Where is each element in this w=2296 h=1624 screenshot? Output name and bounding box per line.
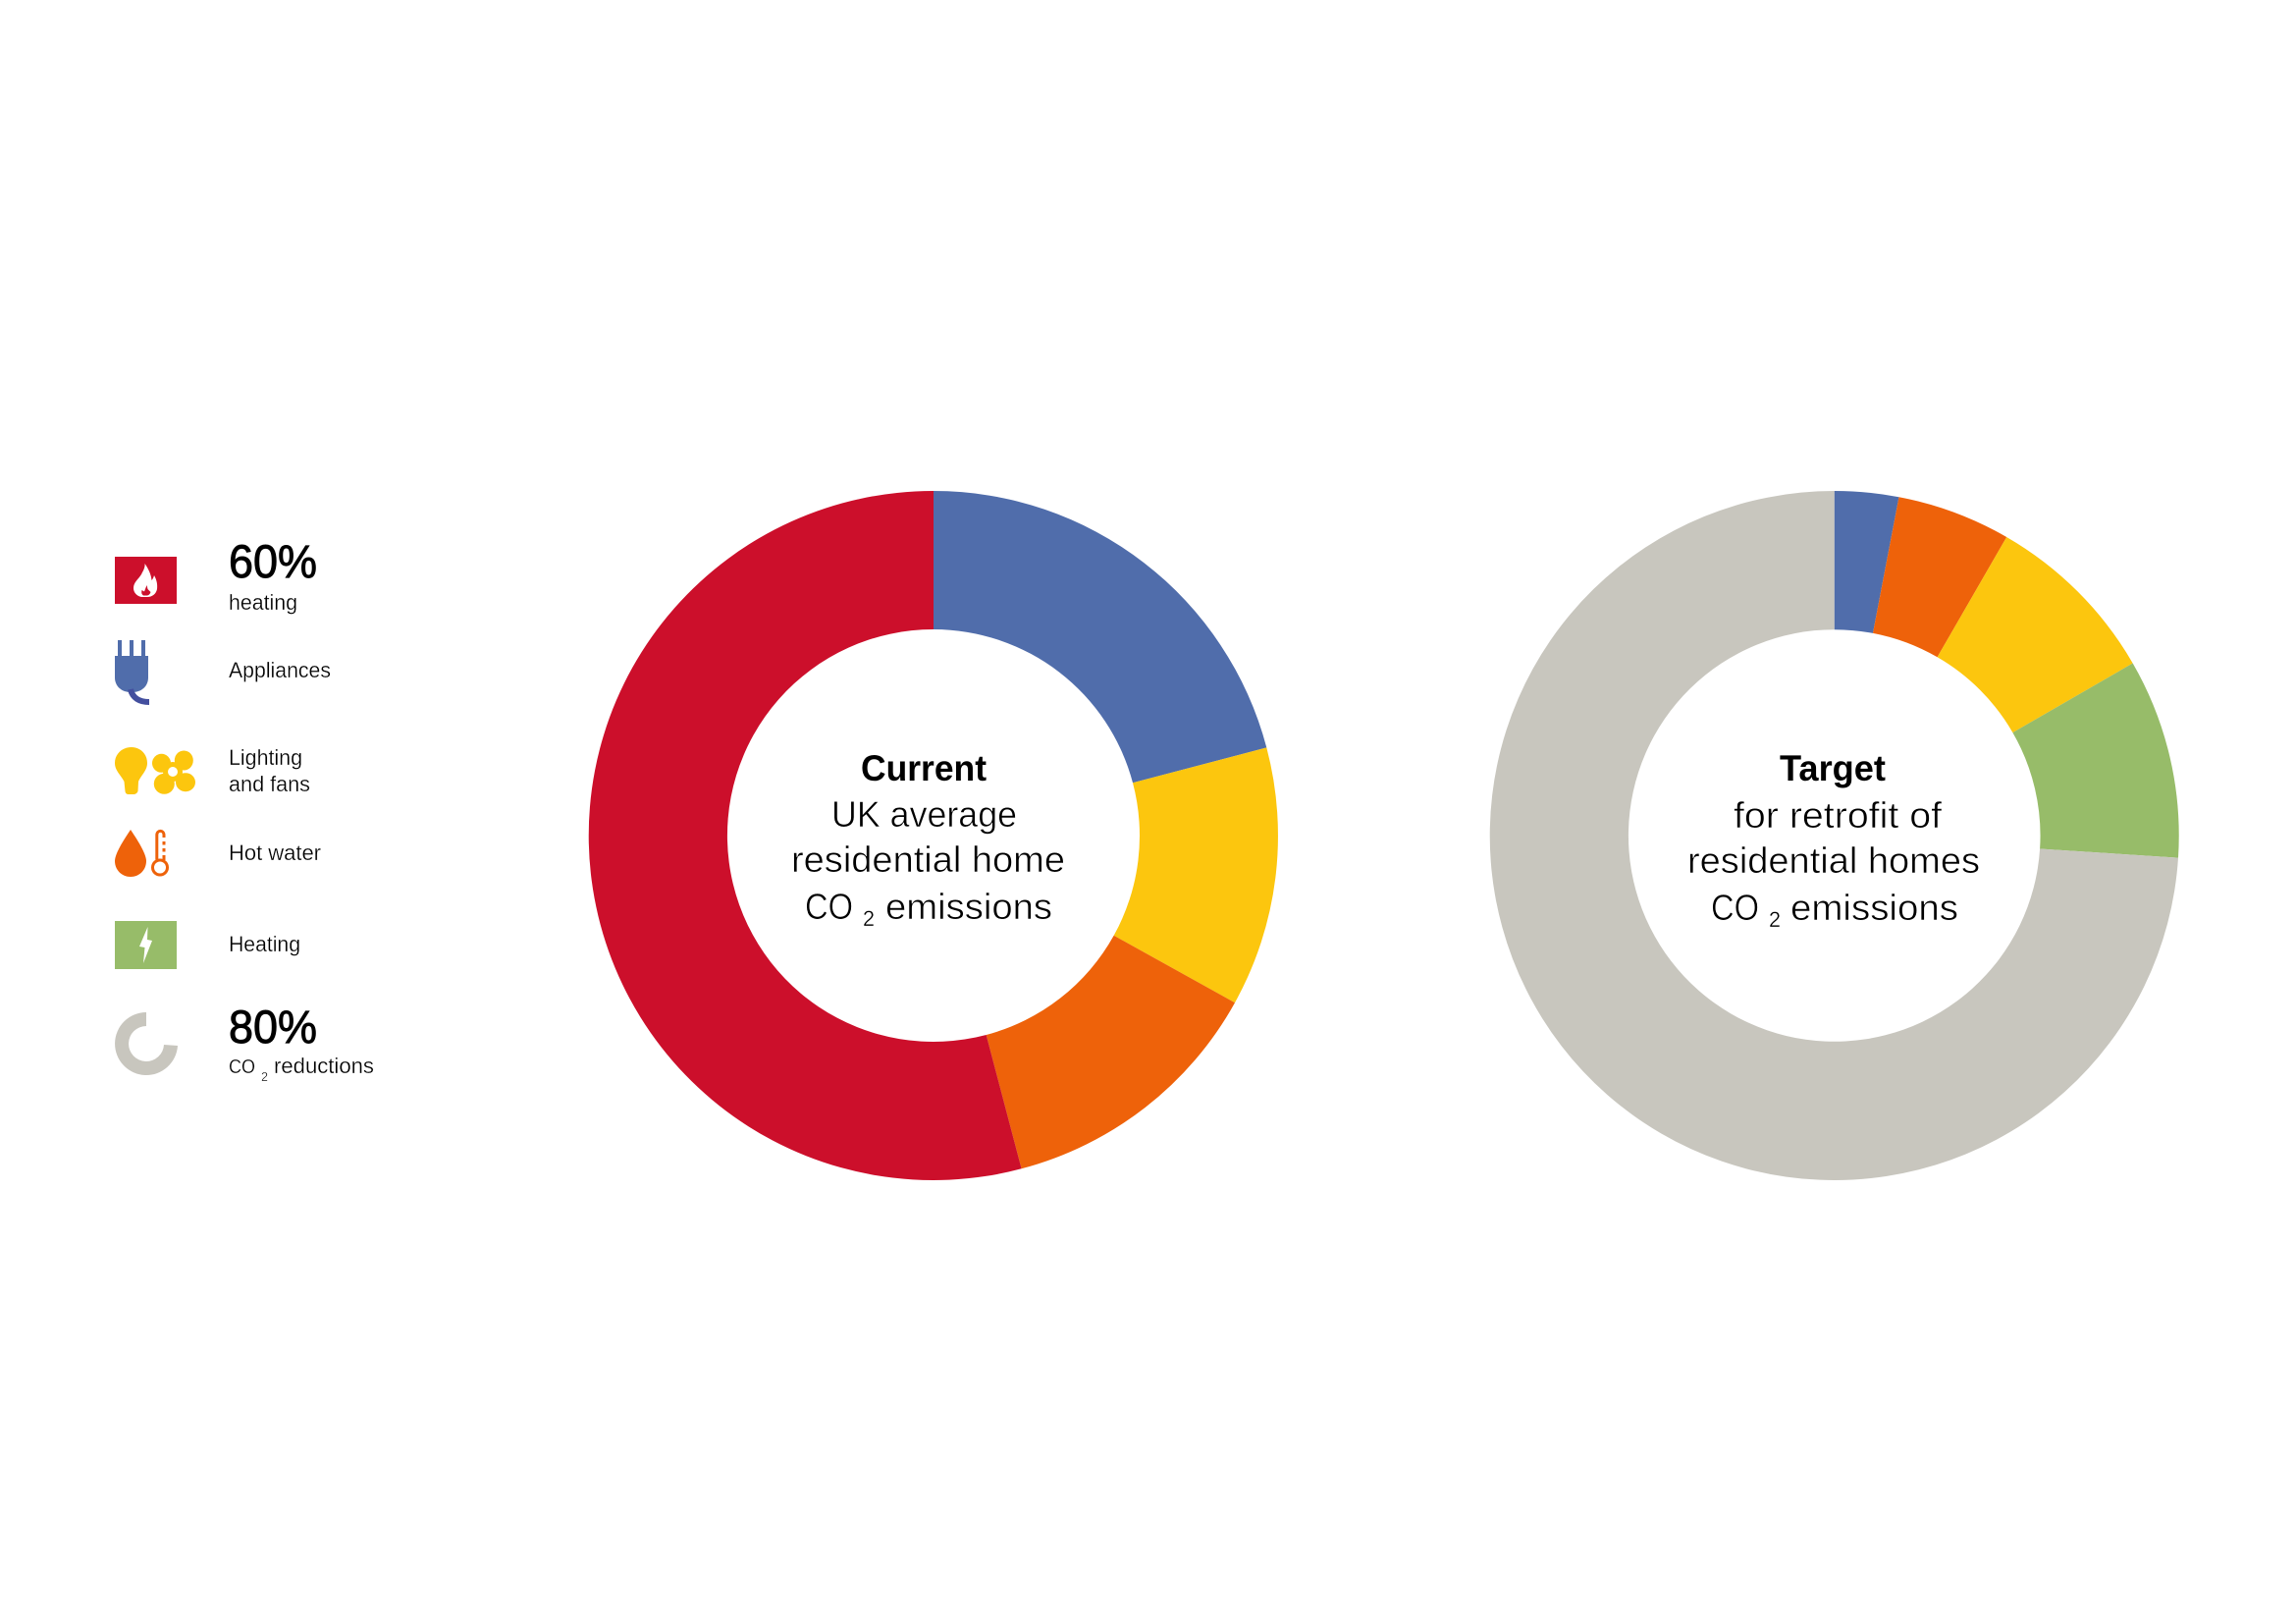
icon: grey ring (115, 1012, 178, 1075)
legend item: appliances (115, 640, 331, 702)
segment: lighting and fans (1938, 537, 2133, 732)
text: residential home: residential home (791, 839, 1065, 880)
icon: lightning bolt (115, 921, 177, 969)
label: heating: heating (229, 590, 297, 615)
label: CO2 reductions: reductions (274, 1054, 374, 1078)
label: Heating: Heating (229, 932, 300, 956)
text: CO2 emissions: 2 (1769, 907, 1781, 932)
label: CO2 reductions: CO (229, 1056, 255, 1078)
label: CO2 reductions (229, 1054, 374, 1084)
legend item: 80% CO2 reductions (115, 1001, 374, 1084)
text: residential homes: residential homes (1687, 840, 1980, 881)
segment: heating (589, 491, 1022, 1180)
icon: thermometer (153, 831, 167, 875)
label: Lighting and fans (229, 745, 310, 796)
segment: CO2 reductions (1490, 491, 2178, 1180)
icon: fan (152, 750, 195, 794)
segment: hot water (1873, 497, 2006, 657)
label: Appliances: Appliances (229, 658, 331, 682)
segment: hot water (987, 936, 1235, 1168)
legend item: electric heating (115, 921, 300, 969)
centre text: target (1687, 748, 1980, 932)
heading: Current: Current (861, 748, 987, 788)
label: Lighting and fans: and fans (229, 772, 310, 796)
text: CO2 emissions (805, 887, 1052, 931)
text: CO2 emissions: 2 (863, 906, 875, 931)
legend (115, 535, 374, 1084)
icon: light bulb (115, 747, 147, 794)
segment: appliances (934, 491, 1266, 783)
text: CO2 emissions: emissions (1790, 888, 1958, 928)
heading: Target: Target (1780, 748, 1886, 788)
text: CO2 emissions: CO (805, 887, 853, 927)
legend item: hot water (115, 830, 321, 877)
text: CO2 emissions: emissions (885, 887, 1052, 927)
centre text: current (791, 748, 1065, 931)
segment: lighting and fans (1114, 747, 1278, 1002)
text: CO2 emissions (1711, 888, 1958, 932)
icon: plug (115, 640, 149, 702)
segment: heating (2012, 664, 2179, 858)
donut chart: current (589, 491, 1278, 1180)
text: for retrofit of: for retrofit of (1734, 795, 1943, 836)
text: UK average: UK average (831, 794, 1017, 835)
text: CO2 emissions: CO (1711, 888, 1759, 928)
label: Lighting and fans: Lighting (229, 745, 302, 770)
label: CO2 reductions: 2 (261, 1069, 268, 1084)
icon: water drop (115, 830, 146, 877)
figure: 80%: 80% (229, 1001, 317, 1053)
icon: flame (115, 557, 177, 604)
label: Hot water: Hot water (229, 840, 321, 865)
legend item: 60% heating (115, 535, 317, 615)
donut chart: target (1490, 491, 2179, 1180)
legend item: lighting and fans (115, 745, 310, 796)
segment: appliances (1835, 491, 1898, 633)
figure: 60%: 60% (229, 535, 317, 587)
